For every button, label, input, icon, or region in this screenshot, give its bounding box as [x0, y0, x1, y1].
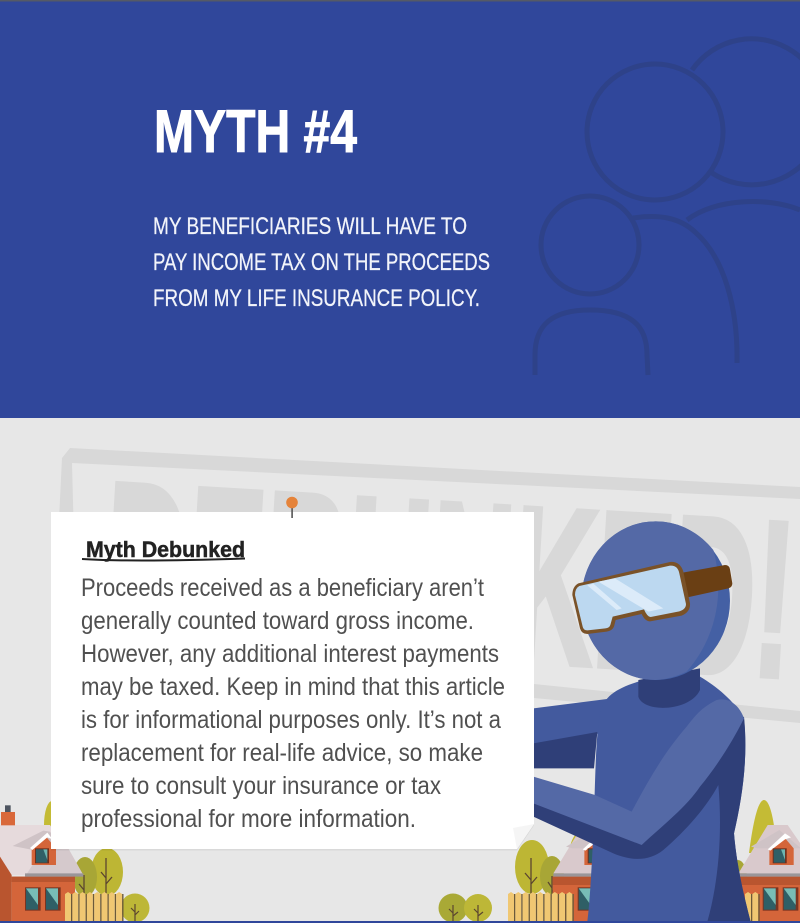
fence: left: [65, 892, 124, 921]
card body text: [81, 574, 505, 833]
title: MYTH #4: [154, 98, 358, 165]
torso: [587, 677, 751, 922]
card body text: generally counted toward gross income.: [81, 607, 474, 635]
goggle strap: [683, 565, 732, 597]
card body text: may be taxed. Keep in mind that this article: [81, 673, 505, 701]
card body text: Proceeds received as a beneficiary aren’t: [81, 574, 484, 602]
house: right: [738, 825, 800, 921]
card body text: sure to consult your insurance or tax: [81, 772, 441, 800]
card heading: Myth Debunked: [86, 537, 245, 562]
trees: centre: [438, 834, 584, 923]
house: left: [0, 805, 83, 921]
back arm: [533, 699, 610, 768]
house: centre: [553, 825, 636, 921]
background: myth section: [0, 0, 800, 418]
head: [581, 521, 730, 680]
trees: right: [729, 800, 776, 896]
card body text: replacement for real-life advice, so make: [81, 739, 483, 767]
icon: family outline: [535, 39, 800, 375]
heading underline: [82, 558, 245, 561]
pin: [286, 497, 298, 518]
neck: [638, 668, 700, 708]
myth statement: FROM MY LIFE INSURANCE POLICY.: [153, 285, 480, 312]
torso shadow and front arm shadow: [533, 717, 751, 922]
myth statement: PAY INCOME TAX ON THE PROCEEDS: [153, 249, 490, 276]
background: debunked section: [0, 418, 800, 923]
myth statement: MY BENEFICIARIES WILL HAVE TO: [153, 213, 467, 240]
fence: centre: [508, 892, 574, 921]
card body text: is for informational purposes only. It’s not a: [81, 706, 501, 734]
trees: left: [44, 801, 150, 923]
character: [533, 521, 751, 922]
bottom line: [0, 921, 800, 923]
myth statement: [153, 213, 490, 312]
card body text: professional for more information.: [81, 805, 416, 833]
goggles: [572, 562, 690, 634]
fence: right: [745, 892, 760, 921]
card body text: However, any additional interest payments: [81, 640, 499, 668]
front arm: [533, 699, 744, 845]
panel: myth debunked card: [51, 497, 534, 850]
folded corner: [513, 824, 534, 849]
